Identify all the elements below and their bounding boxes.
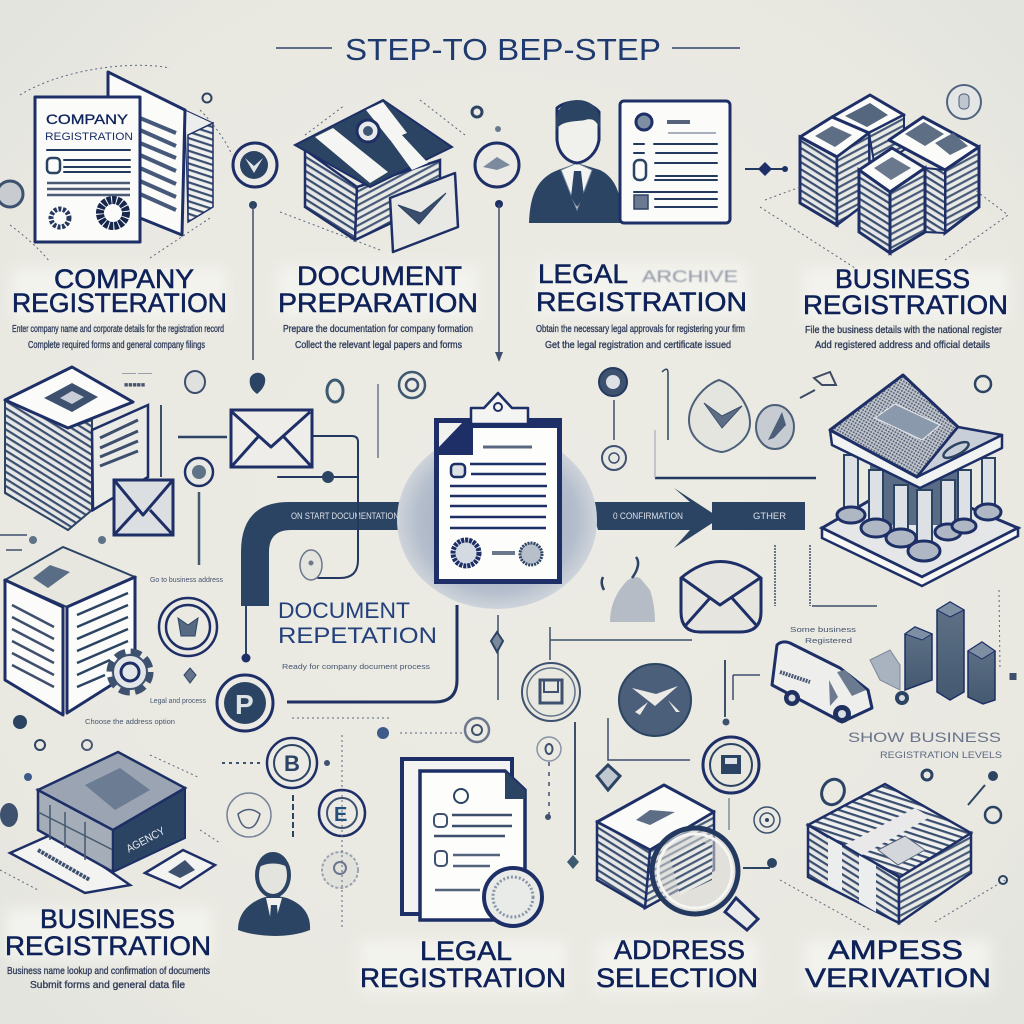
panel: document preparation xyxy=(278,100,478,351)
icon: ring small xyxy=(754,807,780,833)
panel: ampess verivation xyxy=(780,770,1007,993)
icon: package bundle xyxy=(808,784,971,923)
title: STEP-TO BEP-STEP xyxy=(345,32,661,67)
flow arrow left xyxy=(241,502,410,606)
icon: monitor badge xyxy=(703,737,759,793)
dashed base xyxy=(780,880,1005,930)
description: Prepare the documentation for company formation xyxy=(283,324,473,335)
description xyxy=(12,324,224,351)
scatter icons: top xyxy=(0,65,501,262)
small label: business xyxy=(848,729,1002,760)
description xyxy=(536,324,745,351)
icon: dark check badge xyxy=(619,664,691,736)
description: Add registered address and official details xyxy=(815,340,990,351)
description: Complete required forms and general company filings xyxy=(28,340,205,351)
icon: outlined circle xyxy=(227,793,271,837)
connectors: top row xyxy=(233,143,788,362)
connectors: middle xyxy=(161,369,877,702)
scatter icons xyxy=(818,770,1007,884)
description xyxy=(7,966,210,991)
heading: document repetation: REPETATION xyxy=(278,623,437,648)
icon: document blocks xyxy=(800,95,979,253)
heading line 2: REGISTRATION xyxy=(803,290,1008,320)
icon: document cube with gear xyxy=(5,547,149,715)
heading: BUSINESS xyxy=(40,904,175,934)
description xyxy=(283,324,473,351)
heading: DOCUMENT xyxy=(297,261,462,291)
connector line right xyxy=(495,200,503,362)
heading: LEGAL xyxy=(420,936,512,966)
check circle right xyxy=(475,143,519,187)
heading line 2: PREPARATION xyxy=(278,288,478,318)
scatter icons: middle: —— —— xyxy=(122,370,152,377)
description: Business name lookup and confirmation of documents xyxy=(7,966,210,977)
heading line 2: REGISTRATION xyxy=(536,287,747,317)
icon: office box: AGENCY xyxy=(124,825,168,855)
scatter icons: middle: Go to business address xyxy=(150,577,223,584)
node lines xyxy=(222,718,489,930)
heading: document repetation xyxy=(278,598,437,671)
icon: document house xyxy=(295,100,458,252)
icon: gear xyxy=(111,653,149,691)
node lines xyxy=(545,660,777,869)
heading: ADDRESS xyxy=(614,935,745,965)
icon: registration documents: COMPANY xyxy=(46,111,129,127)
icon: office box xyxy=(10,752,215,893)
icon: document with seal xyxy=(402,759,542,926)
scatter marks xyxy=(0,740,220,890)
central clipboard hub xyxy=(241,393,805,609)
heading line 2: REGISTERATION xyxy=(12,288,227,318)
panel: address selection xyxy=(596,785,758,993)
scatter icons: middle: Choose the address option xyxy=(85,719,175,726)
description: Collect the relevant legal papers and forms xyxy=(295,340,462,351)
clipboard xyxy=(434,393,562,584)
icon: faded seal xyxy=(322,852,358,888)
heading: document repetation: Ready for company document process xyxy=(282,664,431,671)
scatter icons: middle: Registered xyxy=(805,638,852,645)
scatter icons: middle xyxy=(0,368,1013,729)
icon: small ring xyxy=(537,737,561,761)
connector line left xyxy=(249,201,257,360)
scatter icons: middle: ■■■■■ xyxy=(124,382,145,389)
icon: shield check xyxy=(689,380,750,452)
arrow labels: 0 CONFIRMATION xyxy=(613,511,683,521)
arrow labels: ON START DOCUMENTATION xyxy=(291,511,399,521)
description: Get the legal registration and certificate issued xyxy=(545,340,731,351)
connector nodes: bottom xyxy=(0,675,489,936)
heading line 2: VERIVATION xyxy=(805,963,991,993)
icon: registration documents: REGISTRATION xyxy=(45,131,133,143)
description xyxy=(805,325,1003,351)
icon: shield small xyxy=(756,405,794,449)
icon: person small xyxy=(238,854,310,936)
check circle left xyxy=(233,143,277,187)
flow arrow right xyxy=(590,488,805,548)
scatter icons: middle: Some business xyxy=(790,627,857,634)
icon: B badge small xyxy=(319,790,365,836)
disc xyxy=(397,431,597,609)
scatter icons: middle: Legal and process xyxy=(150,698,206,705)
icon: B badge small: E xyxy=(334,804,347,826)
bar chart xyxy=(870,602,995,705)
icon: small lock circle xyxy=(947,85,981,119)
arrow labels xyxy=(291,511,787,521)
envelope: upper xyxy=(231,410,312,467)
icon: P badge xyxy=(217,675,273,731)
icon: bank building xyxy=(822,375,1018,586)
description: File the business details with the national register xyxy=(805,325,1003,336)
heading: document repetation: DOCUMENT xyxy=(278,598,410,623)
icon: P badge: P xyxy=(235,689,254,720)
heading line 2: SELECTION xyxy=(596,963,758,993)
small label: business: SHOW BUSINESS xyxy=(848,729,1001,745)
icon: bag xyxy=(602,557,655,622)
node xyxy=(745,162,788,176)
heading: COMPANY xyxy=(54,264,194,294)
heading: BUSINESS xyxy=(835,264,970,294)
envelope: lower xyxy=(681,562,761,632)
panel: legal registration bottom xyxy=(360,759,566,993)
icon: person with profile xyxy=(529,100,730,223)
panel: company registration xyxy=(12,72,227,351)
icon: badge xyxy=(522,663,580,721)
description: Obtain the necessary legal approvals for registering your firm xyxy=(536,324,745,335)
heading: AMPESS xyxy=(828,935,963,965)
icon: delivery van xyxy=(772,642,872,723)
base dashed outline xyxy=(760,187,1008,268)
icon: pin xyxy=(597,765,620,790)
panel: business registration top xyxy=(760,85,1008,351)
small label: business: REGISTRATION LEVELS xyxy=(880,750,1002,760)
icon: B badge xyxy=(267,738,317,788)
arrow labels: GTHER xyxy=(753,511,787,521)
panel: business registration bottom xyxy=(5,752,215,991)
icon: box with magnifier xyxy=(597,785,758,930)
icon: registration documents xyxy=(35,72,213,242)
heading: LEGAL xyxy=(538,259,628,289)
heading line 2: REGISTRATION xyxy=(360,963,566,993)
description: Submit forms and general data file xyxy=(30,980,185,991)
faded heading word: ARCHIVE xyxy=(642,267,738,286)
icon: B badge: B xyxy=(284,751,300,776)
panel: legal registration xyxy=(529,100,747,351)
heading line 2: REGISTRATION xyxy=(5,931,211,961)
icon: paper stack with envelope xyxy=(5,367,173,535)
connector nodes: lower centre xyxy=(522,660,780,869)
description: Enter company name and corporate details for the registration record xyxy=(12,324,224,335)
